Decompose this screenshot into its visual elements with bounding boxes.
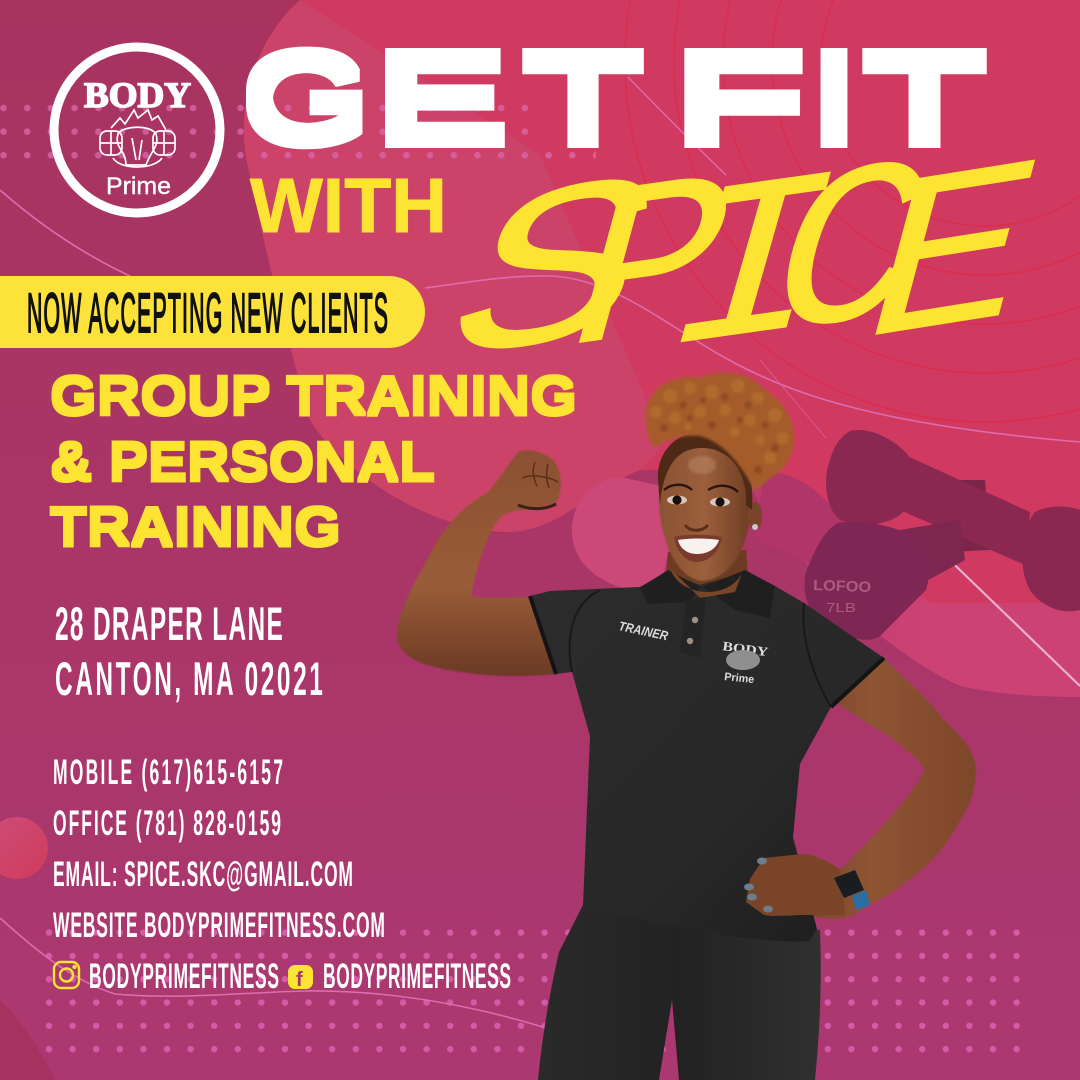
shirt label TRAINER: TRAINER: [617, 618, 670, 643]
dumbbell: lower: 7LB: [826, 600, 856, 615]
title script: SPICE: C: [765, 120, 932, 400]
face: [659, 440, 751, 581]
logo badge: [54, 47, 220, 213]
hand re-drawn over shirt: [746, 854, 845, 916]
handle: instagram: BODYPRIMEFITNESS: [89, 956, 279, 996]
title: GET FIT: [240, 27, 988, 170]
background shape: large red blob: [244, 0, 1080, 603]
dumbbell label: LOFOO: [813, 577, 872, 596]
handle: facebook: BODYPRIMEFITNESS: [323, 956, 511, 996]
heading: group training and personal training: [50, 364, 577, 558]
sleeve seams: [570, 590, 831, 707]
contact details: MOBILE (617)615-6157: [53, 752, 283, 792]
shirt: [530, 572, 884, 942]
heading: group training and personal training: GROUP TRAINING: [50, 364, 577, 426]
leggings: [538, 905, 821, 1080]
ear and earring: [748, 502, 762, 530]
hairline: [658, 432, 752, 510]
shirt logo: [722, 638, 770, 686]
throat skin: [670, 568, 744, 598]
address: [55, 597, 323, 705]
collar: [640, 570, 775, 618]
background shape: lower pink band: [740, 470, 1080, 697]
heading: group training and personal training: TRAINING: [50, 496, 341, 558]
title script: SPICE: S: [441, 133, 661, 426]
smile: [674, 535, 722, 562]
title script: SPICE: E: [864, 121, 1038, 406]
contact details: WEBSITE BODYPRIMEFITNESS.COM: [53, 905, 385, 945]
banner: now accepting new clients: NOW ACCEPTING NEW CLIENTS: [27, 282, 388, 344]
contact details: OFFICE (781) 828-0159: [53, 803, 281, 843]
address: CANTON, MA 02021: [55, 652, 323, 705]
dot grid: bottom: [45, 921, 1021, 1061]
nose: [685, 525, 708, 530]
background shape: rounded blob behind head: [572, 478, 680, 594]
dot grid: top: [0, 96, 596, 168]
social row: [54, 956, 511, 996]
title script: SPICE: [441, 120, 1038, 426]
contact details: EMAIL: SPICE.SKC@GMAIL.COM: [53, 854, 353, 894]
icon: facebook: f: [296, 969, 303, 991]
logo word Prime: Prime: [106, 173, 171, 200]
dumbbell: upper: [826, 430, 1080, 611]
title: GET FIT: E: [372, 27, 512, 170]
sleeve cuff edges: [530, 596, 884, 707]
title: GET FIT: I: [810, 27, 858, 170]
icon: instagram: [54, 962, 79, 988]
background shape: dark magenta wave: [755, 472, 875, 600]
shirt logo: Prime: [724, 671, 755, 686]
icon: facebook: [288, 965, 313, 991]
title: GET FIT: T: [521, 27, 645, 170]
title: GET FIT: F: [670, 27, 810, 170]
smartwatch: [834, 870, 870, 910]
address: 28 DRAPER LANE: [55, 597, 283, 650]
left arm flexed: [397, 450, 561, 676]
person: trainer: [397, 373, 976, 1080]
decorative circle on left edge: [0, 817, 48, 879]
fist detail: [518, 462, 558, 509]
title: GET FIT: T: [861, 27, 988, 170]
title script: SPICE: I: [663, 132, 840, 414]
shirt logo: BODY: [722, 638, 770, 659]
right arm on hip: [746, 658, 976, 919]
logo word BODY: BODY: [84, 75, 191, 115]
dumbbell: lower: [804, 520, 965, 640]
fingernails: [744, 858, 773, 912]
forehead highlight: [688, 456, 716, 474]
placket and buttons: [680, 597, 706, 658]
logo emblem: [100, 110, 175, 167]
title script: SPICE: P: [567, 134, 734, 414]
heading: group training and personal training: & PERSONAL: [50, 430, 435, 492]
neck: [664, 550, 750, 618]
dumbbells: [804, 430, 1080, 640]
hair: [646, 373, 794, 492]
concentric ring lines: [625, 0, 1080, 422]
contact details: [53, 752, 385, 945]
eyes and brows: [664, 485, 738, 507]
subtitle: WITH: WITH: [250, 163, 447, 249]
background shape: lighter diagonal band: [244, 0, 667, 532]
title: GET FIT: G: [240, 27, 372, 170]
